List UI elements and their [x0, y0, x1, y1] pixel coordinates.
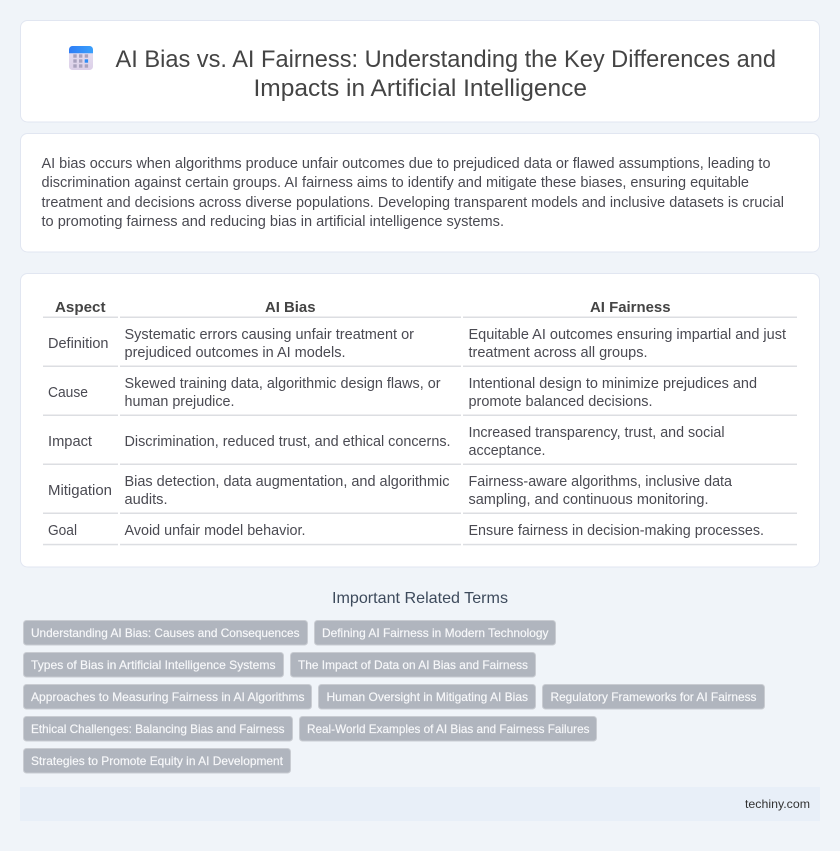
table row: impact — [43, 425, 797, 465]
table row: impact: Discrimination, reduced trust, and ethical concerns. — [124, 434, 450, 450]
table row: cause — [43, 376, 797, 416]
table header row: AI Fairness — [590, 299, 670, 316]
table row: mitigation: sampling, and continuous monitoring. — [468, 492, 708, 508]
tag: Defining AI Fairness in Modern Technology — [322, 626, 548, 640]
table row: definition: treatment across all groups. — [468, 345, 648, 361]
table row: impact: Increased transparency, trust, and social — [468, 425, 724, 441]
tag — [24, 748, 290, 773]
text block: introduction paragraph: treatment and decisions across diverse populations. Developing transparent models and inclusive datasets is crucial — [42, 195, 784, 211]
table row: cause: promote balanced decisions. — [468, 394, 652, 410]
tag — [318, 684, 536, 709]
table row: goal: Goal — [48, 523, 77, 539]
text block: introduction paragraph: AI bias occurs when algorithms produce unfair outcomes due to prejudiced data or flawed assumptions, leading to — [42, 156, 770, 172]
tag: Strategies to Promote Equity in AI Development — [31, 754, 284, 768]
tag: Regulatory Frameworks for AI Fairness — [550, 690, 756, 704]
table row: mitigation: Fairness-aware algorithms, inclusive data — [468, 474, 732, 490]
tag — [542, 684, 764, 709]
table row: impact: Impact — [48, 434, 92, 450]
heading: important related terms: Important Related Terms — [332, 590, 508, 607]
table row: definition: Equitable AI outcomes ensuring impartial and just — [468, 327, 786, 343]
tag: Real-World Examples of AI Bias and Fairness Failures — [307, 722, 590, 736]
tag — [24, 652, 284, 677]
table row: goal — [43, 523, 797, 545]
footer — [20, 787, 820, 821]
tag — [290, 652, 536, 677]
tag: Approaches to Measuring Fairness in AI Algorithms — [31, 690, 304, 704]
tag — [300, 716, 596, 741]
tag list: related terms — [24, 620, 764, 773]
table row: cause: Intentional design to minimize prejudices and — [468, 376, 757, 392]
icon: calendar — [69, 46, 93, 70]
table row: mitigation: Mitigation — [48, 483, 112, 499]
tag: Types of Bias in Artificial Intelligence Systems — [31, 658, 276, 672]
tag — [24, 684, 312, 709]
text block: introduction paragraph — [42, 156, 784, 230]
table row: mitigation: audits. — [124, 492, 168, 508]
table header row: AI Bias — [265, 299, 316, 316]
tag: Ethical Challenges: Balancing Bias and Fairness — [31, 722, 284, 736]
title: Impacts in Artificial Intelligence — [254, 75, 587, 102]
tag — [314, 620, 556, 645]
panel: introduction — [20, 134, 820, 252]
title: AI Bias vs. AI Fairness: Understanding the Key Differences and — [116, 46, 776, 73]
tag: The Impact of Data on AI Bias and Fairness — [298, 658, 528, 672]
table row: definition: prejudiced outcomes in AI models. — [124, 345, 346, 361]
table row: cause: Skewed training data, algorithmic design flaws, or — [124, 376, 441, 392]
table header row — [43, 299, 797, 318]
table row: definition — [43, 327, 797, 367]
text block: introduction paragraph: to promoting fairness and reducing bias in artificial intelligence systems. — [42, 214, 504, 230]
tag: Human Oversight in Mitigating AI Bias — [326, 690, 528, 704]
table row: definition: Systematic errors causing unfair treatment or — [124, 327, 414, 343]
table row: definition: Definition — [48, 336, 108, 352]
table row: mitigation: Bias detection, data augmentation, and algorithmic — [124, 474, 450, 490]
table header row: Aspect — [55, 299, 106, 316]
text block: introduction paragraph: discrimination against certain groups. AI fairness aims to identify and mitigate these biases, ensuring equitable — [42, 175, 749, 191]
tag — [24, 620, 308, 645]
table row: impact: acceptance. — [468, 443, 546, 459]
table row: goal: Ensure fairness in decision-making processes. — [468, 523, 764, 539]
tag — [24, 716, 292, 741]
table row: goal: Avoid unfair model behavior. — [124, 523, 306, 539]
table row: mitigation — [43, 474, 797, 514]
panel: comparison table — [20, 274, 820, 567]
footer: techiny.com — [745, 797, 810, 811]
tag: Understanding AI Bias: Causes and Consequences — [31, 626, 300, 640]
panel: title card — [20, 20, 820, 122]
table row: cause: Cause — [48, 385, 88, 401]
title — [116, 46, 776, 102]
table row: cause: human prejudice. — [124, 394, 234, 410]
